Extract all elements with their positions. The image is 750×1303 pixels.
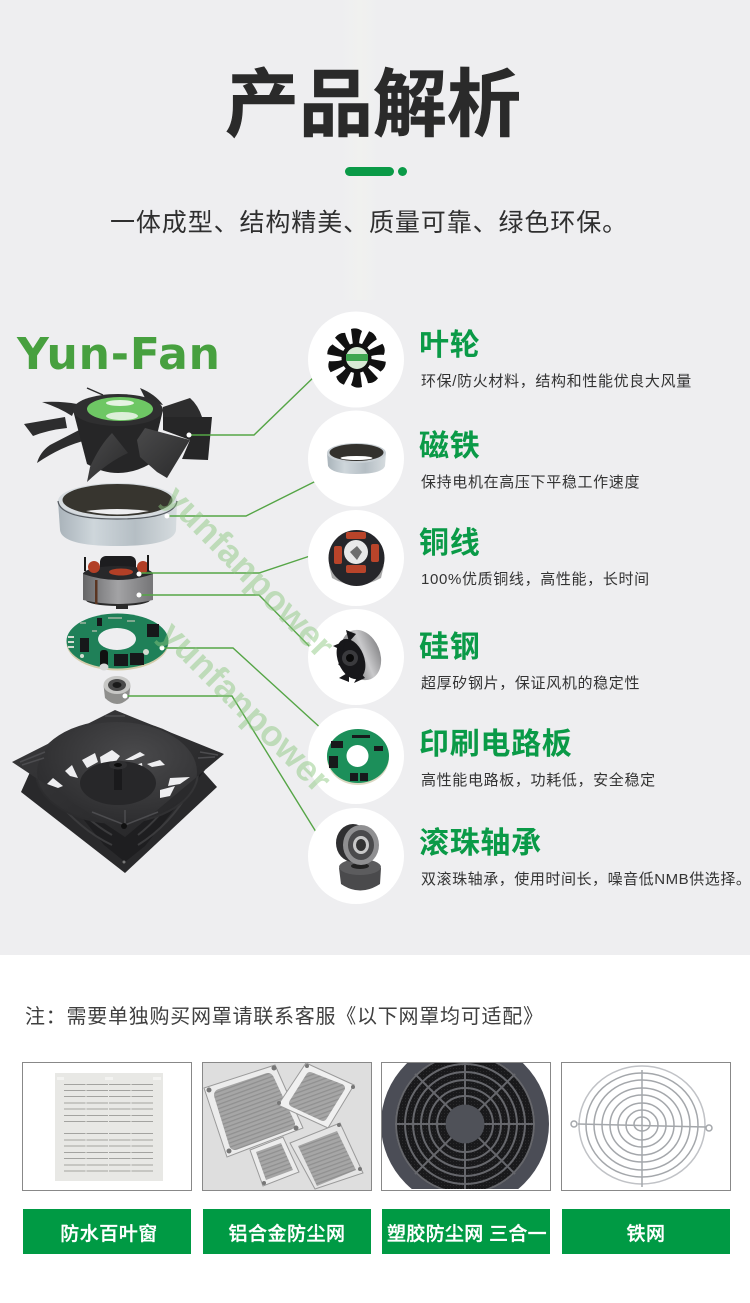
- feature: circuit board: 印刷电路板: [419, 728, 572, 761]
- exploded fan: printed circuit board: [66, 614, 168, 670]
- option card image: aluminium grilles: [202, 1062, 372, 1190]
- feature: copper wire: 100%优质铜线，高性能，长时间: [421, 571, 650, 588]
- option card image: louver: [22, 1062, 192, 1190]
- option button: aluminium: [203, 1209, 371, 1254]
- option button: iron mesh: [562, 1209, 730, 1254]
- option button: louver: 防水百叶窗: [60, 1223, 158, 1245]
- thumbnail: magnet: [308, 410, 404, 506]
- thumbnail: bearings: [308, 808, 404, 904]
- leader line: circuit board: [160, 646, 324, 731]
- exploded fan: bearing: [104, 676, 130, 704]
- impeller label: [87, 397, 153, 421]
- exploded fan: impeller: [24, 388, 212, 482]
- leader line: silicon steel: [136, 592, 315, 652]
- option button: plastic: [382, 1209, 550, 1254]
- option card image: plastic dust guard: [381, 1062, 551, 1191]
- feature: magnet: 保持电机在高压下平稳工作速度: [421, 474, 640, 491]
- exploded fan: black frame: [12, 710, 224, 873]
- feature: silicon steel: [419, 631, 640, 692]
- thumbnail: copper wire: [308, 510, 404, 606]
- feature: impeller: [419, 329, 692, 390]
- feature: impeller: 环保/防火材料，结构和性能优良大风量: [421, 373, 692, 390]
- watermark: yunfanpower upper: yunfanpower: [156, 477, 343, 665]
- brand logo: Yun-Fan: Yun-Fan: [16, 329, 220, 380]
- title accent: green bar and dot: [345, 167, 407, 176]
- thumbnail: impeller: [308, 312, 404, 408]
- exploded fan: copper stator: [83, 555, 153, 609]
- leader line: bearing: [122, 694, 321, 840]
- feature: impeller: 叶轮: [419, 329, 480, 362]
- leader line: magnet: [164, 479, 320, 518]
- option button: iron mesh: 铁网: [626, 1223, 666, 1245]
- thumbnail: circuit board: [308, 708, 404, 804]
- leader line: copper wire: [136, 555, 313, 576]
- option button: plastic: 塑胶防尘网 三合一: [387, 1223, 547, 1245]
- option button: louver: [23, 1209, 191, 1254]
- watermark: yunfanpower lower: yunfanpower: [152, 613, 340, 800]
- feature: ball bearing: 双滚珠轴承，使用时间长，噪音低NMB供选择。: [421, 871, 750, 888]
- feature: ball bearing: [419, 827, 750, 888]
- title: 产品解析: [225, 63, 521, 146]
- feature: copper wire: 铜线: [419, 527, 480, 560]
- background: grey product area: [0, 0, 750, 955]
- feature: magnet: 磁铁: [419, 430, 480, 463]
- feature: ball bearing: 滚珠轴承: [419, 827, 542, 860]
- subtitle: 一体成型、结构精美、质量可靠、绿色环保。: [110, 209, 628, 237]
- feature: silicon steel: 硅钢: [419, 631, 480, 664]
- feature: circuit board: [419, 728, 656, 789]
- feature: circuit board: 高性能电路板，功耗低，安全稳定: [421, 771, 656, 789]
- note text: 注：需要单独购买网罩请联系客服《以下网罩均可适配》: [25, 1005, 544, 1028]
- exploded fan: magnet ring: [58, 483, 177, 546]
- option button: aluminium: 铝合金防尘网: [228, 1223, 346, 1245]
- option card image: wire guard: [562, 1062, 730, 1190]
- feature: magnet: [419, 430, 640, 491]
- leader line: impeller: [186, 374, 317, 438]
- thumbnail: silicon steel: [308, 609, 404, 705]
- feature: copper wire: [419, 527, 650, 588]
- feature: silicon steel: 超厚矽钢片，保证风机的稳定性: [421, 675, 640, 692]
